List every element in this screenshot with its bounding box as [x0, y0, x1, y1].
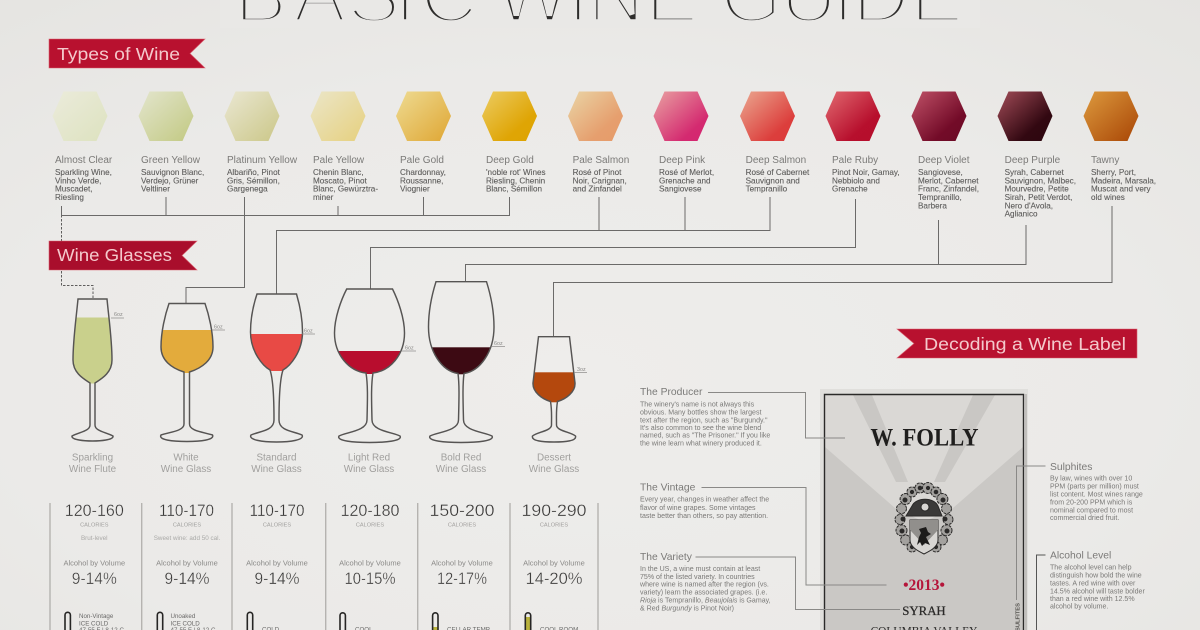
wine type: Pale Yellow: Moscato, Pinot: [313, 176, 367, 185]
callout: The Variety: The Variety: [640, 552, 693, 563]
wine type: Deep Pink: Deep Pink: [659, 155, 706, 166]
wine type: Green Yellow: Verdejo, Grüner: [141, 176, 199, 185]
connector: pale ruby to light red glass: [370, 199, 856, 289]
callout: Alcohol Level: alcohol by volume.: [1050, 604, 1108, 611]
section ribbon: Types of Wine: [49, 39, 205, 68]
wine type: Deep Purple: [998, 92, 1076, 219]
wine type: Platinum Yellow: Gargenega: [227, 185, 268, 194]
wine type: Tawny: Tawny: [1091, 155, 1119, 166]
wine type: Deep Violet: Franc, Zinfandel,: [918, 185, 979, 194]
wine type: Tawny: Madeira, Marsala,: [1091, 176, 1156, 185]
callout: Alcohol Level: Alcohol Level: [1050, 551, 1111, 562]
wine label: [820, 389, 1028, 630]
stats column: dessert: CALORIES: [540, 523, 568, 529]
callout: Sulphites: from 20-200 PPM which is: [1050, 499, 1133, 506]
wine type: Deep Violet: Tempranillo,: [918, 193, 962, 202]
wine type: Pale Salmon: Rosé of Pinot: [573, 168, 621, 177]
wine type: Tawny: Sherry, Port,: [1091, 168, 1136, 177]
wine type: Pale Ruby: Pinot Noir, Gamay,: [832, 168, 900, 177]
stats column: standard: CALORIES: [263, 523, 291, 529]
stats column: dessert: [522, 501, 586, 630]
stats column: dessert: Alcohol by Volume: [523, 558, 585, 567]
callout: Alcohol Level: than a red wine with 12.5%: [1050, 596, 1135, 603]
glass: bold red wine glass: Wine Glass: [436, 464, 486, 475]
callout: The Producer: The Producer: [640, 387, 703, 398]
wine type: Deep Salmon: Rosé of Cabernet: [746, 168, 809, 177]
glass: bold red wine glass: [426, 282, 505, 475]
wine type: Deep Purple: Sauvignon, Malbec,: [1005, 176, 1076, 185]
wine type: Pale Ruby: Nebbiolo and: [832, 176, 880, 185]
callout: The Vintage: [640, 483, 886, 585]
stats column: white: CALORIES: [173, 523, 201, 529]
stats column: sparkling: ICE COLD: [79, 620, 109, 628]
section ribbon: Decoding a Wine Label: Decoding a Wine Label: [924, 334, 1126, 354]
glass: dessert wine glass: Wine Glass: [529, 464, 579, 475]
wine type: Platinum Yellow: [224, 92, 298, 194]
wine type: Deep Purple: Mourvedre, Petite: [1005, 185, 1069, 194]
wine type: Deep Purple: Aglianico: [1005, 210, 1038, 219]
stats column: sparkling: Brut-level: [81, 535, 108, 542]
wine type: Tawny: Muscat and very: [1091, 185, 1152, 194]
stats column: light red: CALORIES: [356, 523, 384, 529]
wine type: Pale Salmon: Noir, Carignan,: [573, 176, 627, 185]
glass: light red wine glass: [332, 289, 416, 475]
stats column: sparkling: [63, 501, 125, 630]
wine type: Deep Gold: Deep Gold: [486, 155, 534, 166]
glass: dessert wine glass: [529, 337, 587, 475]
wine type: Deep Violet: Sangiovese,: [918, 168, 963, 177]
callout: Sulphites: commercial dried fruit.: [1050, 515, 1119, 522]
wine type: Deep Gold: Riesling, Chenin: [486, 176, 545, 185]
stats column: standard: [246, 501, 308, 630]
wine type: Deep Pink: Sangiovese: [659, 185, 702, 194]
wine type: Deep Purple: Syrah, Cabernet: [1005, 168, 1064, 177]
glass: sparkling wine flute: 6oz: [114, 312, 123, 318]
stats column: standard: 110-170: [250, 501, 304, 520]
stats column: white: 110-170: [159, 501, 214, 520]
stats column: light red: Alcohol by Volume: [339, 558, 401, 567]
callout: Sulphites: nominal compared to most: [1050, 507, 1133, 514]
wine type: Almost Clear: Almost Clear: [55, 155, 113, 166]
label vintage: •2013•: [903, 577, 945, 594]
wine type: Deep Purple: Nero d'Avola,: [1005, 201, 1053, 210]
wine type: Pale Ruby: [826, 92, 900, 194]
callout: The Producer: named, such as "The Prisoner." If you like: [640, 433, 770, 440]
glass: sparkling wine flute: Sparkling: [72, 453, 113, 464]
section ribbon: Decoding a Wine Label: [897, 329, 1137, 358]
glass: dessert wine glass: 3oz: [577, 367, 586, 373]
glass: white wine glass: 6oz: [214, 324, 223, 330]
label crest: [895, 482, 953, 554]
label variety: SYRAH: [902, 604, 946, 618]
glass: bold red wine glass: Bold Red: [441, 453, 481, 464]
callout: The Variety: & Red Burgundy is Pinot Noir): [640, 605, 734, 612]
callout: Alcohol Level: distinguish how bold the wine: [1050, 573, 1142, 580]
wine type: Almost Clear: Muscadet,: [55, 185, 92, 194]
wine type: Green Yellow: Veltliner: [141, 185, 170, 194]
callout: The Vintage: flavor of wine grapes. Some vintages: [640, 505, 756, 512]
callout: The Variety: Rioja is Tempranillo, Beaujolais is Gamay,: [640, 597, 771, 604]
glass: light red wine glass: 6oz: [405, 346, 414, 352]
wine type: Almost Clear: [52, 92, 113, 202]
wine type: Pale Salmon: Pale Salmon: [573, 155, 629, 166]
stats column: sparkling: 120-160: [65, 501, 124, 520]
wine type: Deep Purple: Deep Purple: [1005, 155, 1061, 166]
wine type: Deep Gold: 'noble rot' Wines: [486, 168, 546, 177]
connector: deep reds to bold red glass: [466, 220, 1026, 282]
wine type: Pale Gold: Roussanne,: [400, 176, 443, 185]
stats column: dessert: 190-290: [522, 501, 586, 520]
glass: light red wine glass: Light Red: [348, 453, 390, 464]
callout: Alcohol Level: The alcohol level can help: [1050, 565, 1131, 572]
column dividers: [50, 503, 598, 630]
glass: white wine glass: [158, 304, 225, 475]
stats column: white: 9-14%: [164, 569, 210, 588]
wine type: Deep Violet: Deep Violet: [918, 155, 970, 166]
callout: Alcohol Level: [1036, 551, 1145, 630]
stats column: white: Alcohol by Volume: [156, 558, 218, 567]
callout: The Producer: [640, 387, 845, 448]
callout: Sulphites: PPM (parts per million) must: [1050, 484, 1139, 491]
wine type: Almost Clear: Riesling: [55, 193, 84, 202]
wine type: Tawny: old wines: [1091, 193, 1125, 202]
stats column: sparkling: 9-14%: [72, 569, 117, 588]
wine type: Pale Gold: Viognier: [400, 185, 430, 194]
wine type: Pale Yellow: [310, 92, 378, 202]
wine type: Green Yellow: Sauvignon Blanc,: [141, 168, 204, 177]
callout: The Vintage: taste better than others, so pay attention.: [640, 513, 768, 520]
wine type: Pale Salmon: and Zinfandel: [573, 185, 622, 194]
wine type: Deep Pink: Rosé of Merlot,: [659, 168, 714, 177]
stats column: bold red: CALORIES: [448, 523, 476, 529]
stats column: white: [154, 501, 221, 630]
stats column: white: Unoaked: [170, 613, 196, 620]
wine type: Deep Salmon: [740, 92, 810, 194]
glass: sparkling wine flute: [69, 299, 124, 475]
wine type: Deep Salmon: Deep Salmon: [746, 155, 806, 166]
wine type: Pale Salmon: [568, 92, 629, 194]
stats column: white: ICE COLD: [170, 620, 200, 628]
wine type: Platinum Yellow: Albariño, Pinot: [227, 168, 280, 177]
stats column: dessert: 14-20%: [526, 569, 582, 588]
wine type: Deep Gold: Blanc, Sémillon: [486, 185, 542, 194]
glass: white wine glass: Wine Glass: [161, 464, 211, 475]
wine type: Almost Clear: Sparkling Wine,: [55, 168, 112, 177]
wine type: Platinum Yellow: Platinum Yellow: [227, 155, 298, 166]
glass: dessert wine glass: Dessert: [537, 453, 571, 464]
callout: Sulphites: list content. Most wines range: [1050, 492, 1143, 499]
callout: Sulphites: By law, wines with over 10: [1050, 476, 1132, 483]
wine type: Pale Yellow: Chenin Blanc,: [313, 168, 364, 177]
connector: sparkling wines to flute (dashed): [62, 215, 93, 298]
wine type: Pale Yellow: miner: [313, 193, 334, 202]
wine type: Deep Salmon: Tempranillo: [746, 185, 788, 194]
wine type: Pale Ruby: Grenache: [832, 185, 868, 194]
callout: Sulphites: Sulphites: [1050, 462, 1092, 473]
callout: The Vintage: The Vintage: [640, 483, 696, 494]
stats column: bold red: [430, 501, 494, 630]
connector: white wines bracket: [62, 197, 510, 303]
wine type: Pale Yellow: Blanc, Gewürztra-: [313, 185, 378, 194]
callout: The Producer: the wine learn what winery produced it.: [640, 441, 762, 448]
glass: standard wine glass: [248, 294, 315, 475]
callout: Alcohol Level: tastes. A red wine with over: [1050, 580, 1136, 587]
wine type: Pale Gold: Pale Gold: [400, 155, 444, 166]
glass: white wine glass: White: [173, 453, 199, 464]
section ribbon: Wine Glasses: Wine Glasses: [57, 245, 172, 265]
stats column: sparkling: Alcohol by Volume: [63, 558, 125, 567]
stats column: bold red: Alcohol by Volume: [431, 558, 493, 567]
callout: Sulphites: [1016, 462, 1143, 600]
glass: standard wine glass: 6oz: [304, 328, 313, 334]
stats column: standard: 9-14%: [254, 569, 300, 588]
wine type: Pale Gold: Chardonnay,: [400, 168, 446, 177]
callout: The Variety: [639, 552, 900, 612]
connector: rosé wines to standard glass: [276, 197, 770, 294]
stats column: light red: [339, 501, 401, 630]
callout: The Producer: The winery's name is not always this: [640, 402, 754, 409]
glass: sparkling wine flute: Wine Flute: [69, 464, 117, 475]
glass: standard wine glass: Wine Glass: [251, 464, 302, 475]
callout: The Producer: obvious. Many bottles show the largest: [640, 409, 761, 416]
glass: bold red wine glass: 6oz: [494, 341, 503, 347]
callout: The Variety: 75% of the listed variety. In countries: [640, 574, 755, 581]
section ribbon: Wine Glasses: [49, 241, 197, 270]
wine type: Green Yellow: Green Yellow: [141, 155, 201, 166]
stats column: sparkling: CALORIES: [80, 523, 109, 529]
label text: producer name: W. FOLLY: [870, 424, 978, 452]
callout: The Variety: variety) learn the associated grapes. (i.e.: [640, 589, 767, 596]
stats column: white: Sweet wine: add 50 cal.: [154, 535, 221, 542]
wine type: Deep Violet: [912, 92, 979, 210]
wine type: Deep Pink: [654, 92, 714, 194]
wine type: Tawny: [1084, 92, 1156, 202]
callout: Alcohol Level: 14.5% alcohol will taste bolder: [1050, 588, 1145, 595]
wine type: Pale Gold: [396, 92, 451, 194]
wine type: Deep Pink: Grenache and: [659, 176, 710, 185]
wine type: Deep Gold: [482, 92, 546, 194]
callout: The Producer: It's also common to see the wine blend: [640, 425, 761, 432]
glass: standard wine glass: Standard: [256, 453, 297, 464]
callout: The Vintage: Every year, changes in weather affect the: [640, 497, 769, 504]
wine type: Deep Salmon: Sauvignon and: [746, 176, 800, 185]
wine type: Pale Ruby: Pale Ruby: [832, 155, 878, 166]
callout: The Variety: In the US, a wine must contain at least: [640, 566, 760, 573]
stats column: bold red: 150-200: [430, 501, 494, 520]
stats column: standard: Alcohol by Volume: [246, 558, 308, 567]
wine type: Deep Violet: Merlot, Cabernet: [918, 176, 979, 185]
callout: The Producer: text after the region, such as "Burgundy.": [640, 417, 768, 424]
wine type: Pale Yellow: Pale Yellow: [313, 155, 365, 166]
stats column: bold red: 12-17%: [437, 569, 487, 588]
glass: light red wine glass: Wine Glass: [344, 464, 394, 475]
title band backdrop: [220, 0, 980, 28]
stats column: sparkling: Non-Vintage: [79, 613, 114, 620]
stats column: light red: 120-180: [340, 501, 400, 520]
connector: tawny to dessert glass: [554, 206, 1112, 337]
section ribbon: Types of Wine: Types of Wine: [57, 44, 180, 64]
wine type: Platinum Yellow: Gris, Sémillon,: [227, 176, 280, 185]
stats column: light red: 10-15%: [344, 569, 396, 588]
wine type: Deep Purple: Sirah, Petit Verdot,: [1005, 193, 1072, 202]
wine type: Almost Clear: Vinho Verde,: [55, 176, 101, 185]
wine type: Green Yellow: [138, 92, 204, 194]
wine type: Deep Violet: Barbera: [918, 201, 947, 210]
callout: The Variety: where wine is named after the region (vs.: [639, 582, 769, 589]
